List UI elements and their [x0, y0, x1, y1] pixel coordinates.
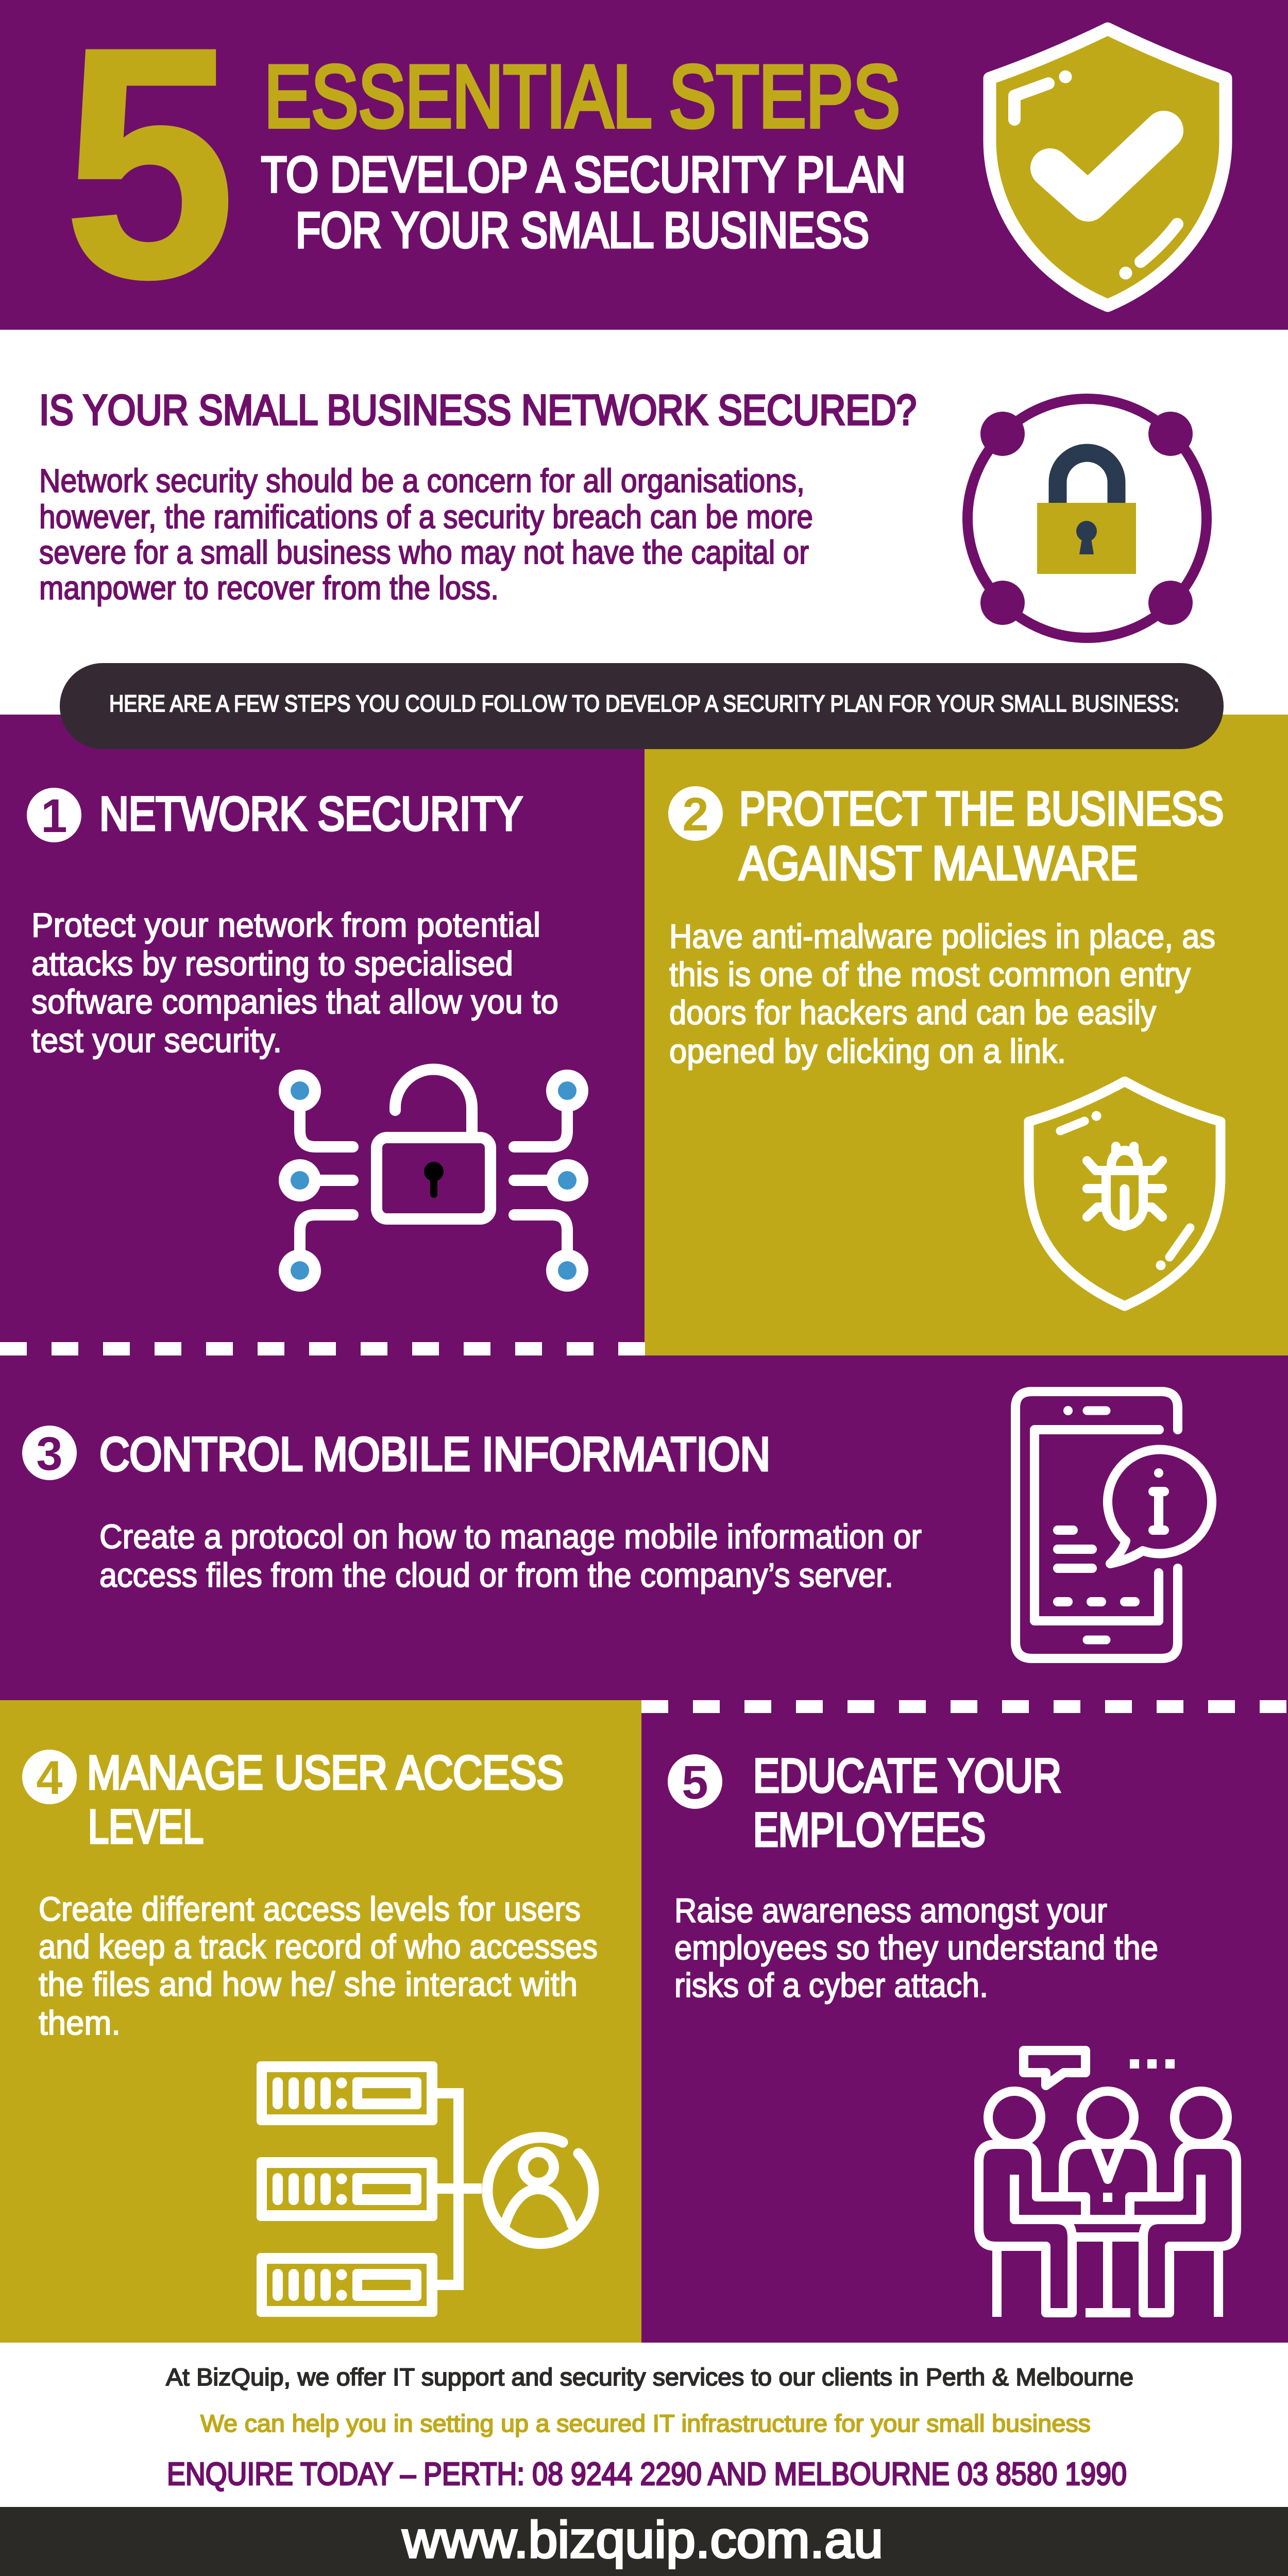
heading: educate your employees: EMPLOYEES: [753, 1804, 986, 1856]
step number 5: [668, 1754, 722, 1809]
text block: step 1 body: software companies that allow you to: [31, 982, 558, 1021]
title: essential steps: ESSENTIAL STEPS: [264, 47, 900, 146]
heading: control mobile information: CONTROL MOBILE INFORMATION: [99, 1428, 770, 1481]
subtitle line 1: TO DEVELOP A SECURITY PLAN: [261, 146, 906, 202]
step number 2: [668, 786, 723, 841]
decorative dashes above step 5: [641, 1700, 1286, 1713]
text: phone numbers: ENQUIRE TODAY – PERTH: 08 9244 2290 AND MELBOURNE 03 8580 1990: [167, 2456, 1127, 2492]
heading: manage user access level: [87, 1747, 564, 1853]
step number 5: 5: [682, 1756, 708, 1809]
heading: manage user access level: MANAGE USER ACCESS: [87, 1747, 564, 1799]
text block: step 4 body: [39, 1890, 598, 2042]
callout: steps intro pill: [60, 663, 1224, 749]
heading: manage user access level: LEVEL: [88, 1801, 204, 1853]
icon: shield with bug: [1029, 1081, 1221, 1306]
icon: three people at a table: [979, 2050, 1236, 2317]
text: help statement: We can help you in setting up a secured IT infrastructure for your small business: [200, 2410, 1091, 2437]
text: support statement: At BizQuip, we offer IT support and security services to our clients in Perth & Melbourne: [166, 2363, 1133, 2391]
text block: step 1 body: attacks by resorting to specialised: [31, 944, 513, 982]
panel: step 1 network security: [0, 715, 645, 1355]
text block: step 2 body: [669, 917, 1215, 1070]
subtitle line 2: FOR YOUR SMALL BUSINESS: [296, 202, 869, 258]
panel: step 4 manage user access level: [0, 1700, 641, 2343]
icon: padlock in network ring: [968, 399, 1207, 638]
text block: step 5 body: [674, 1891, 1158, 2004]
text block: intro paragraph: severe for a small business who may not have the capital or: [39, 534, 809, 571]
text block: step 1 body: Protect your network from potential: [31, 906, 540, 944]
panel: step 3 control mobile information: [0, 1355, 1288, 1700]
text block: step 4 body: Create different access levels for users: [39, 1890, 581, 1928]
text block: intro paragraph: however, the ramifications of a security breach can be more: [39, 498, 813, 535]
step number 1: 1: [41, 790, 67, 842]
heading: network security: NETWORK SECURITY: [99, 788, 522, 840]
text block: step 3 body: access files from the cloud or from the company’s server.: [99, 1556, 893, 1594]
text block: step 4 body: them.: [39, 2004, 121, 2042]
heading: protect the business: [739, 783, 1224, 890]
text block: step 1 body: test your security.: [31, 1021, 282, 1059]
icon: shield with check mark: [990, 29, 1226, 306]
text block: step 4 body: the files and how he/ she interact with: [39, 1965, 578, 2003]
text block: step 4 body: and keep a track record of who accesses: [39, 1927, 598, 1965]
text block: step 2 body: Have anti-malware policies in place, as: [669, 917, 1215, 955]
text block: step 3 body: Create a protocol on how to manage mobile information or: [99, 1517, 922, 1555]
text block: intro paragraph: [39, 462, 813, 606]
text block: step 5 body: employees so they understand the: [674, 1928, 1158, 1967]
text block: step 2 body: opened by clicking on a link.: [669, 1032, 1066, 1070]
heading: network secured question: IS YOUR SMALL BUSINESS NETWORK SECURED?: [39, 386, 917, 434]
step number 4: [22, 1750, 77, 1804]
panel: step 2 protect against malware: [645, 715, 1288, 1355]
step number 3: 3: [36, 1428, 63, 1480]
text block: step 5 body: Raise awareness amongst your: [674, 1891, 1107, 1929]
step number 2: 2: [682, 788, 709, 841]
heading: educate your employees: EDUCATE YOUR: [753, 1750, 1061, 1802]
text block: step 2 body: this is one of the most common entry: [669, 955, 1191, 993]
panel: step 5 educate your employees: [641, 1700, 1288, 2343]
text block: step 1 body: [31, 906, 558, 1059]
panel: footer call to action: [166, 2363, 1133, 2492]
panel: website bar: [0, 2507, 1288, 2576]
icon: servers linked to user: [257, 2061, 594, 2317]
text block: step 3 body: [99, 1517, 922, 1594]
icon: circuit padlock: [279, 1070, 588, 1292]
heading: educate your employees: [753, 1750, 1061, 1856]
step number 1: [27, 788, 81, 842]
text block: intro paragraph: manpower to recover from the loss.: [39, 569, 499, 606]
panel: header banner: [0, 0, 1288, 346]
text block: intro paragraph: Network security should be a concern for all organisations,: [39, 462, 805, 499]
heading: protect the business: AGAINST MALWARE: [739, 837, 1138, 890]
text block: step 5 body: risks of a cyber attach.: [674, 1966, 988, 2004]
icon: phone with info bubble: [1015, 1392, 1212, 1658]
panel: intro section: [39, 386, 1207, 638]
step number 3: [22, 1426, 77, 1480]
step number 4: 4: [36, 1752, 63, 1804]
decorative dashes under step 1: [0, 1342, 645, 1355]
text block: step 2 body: doors for hackers and can be easily: [669, 993, 1156, 1031]
text: website url: www.bizquip.com.au: [402, 2511, 883, 2569]
